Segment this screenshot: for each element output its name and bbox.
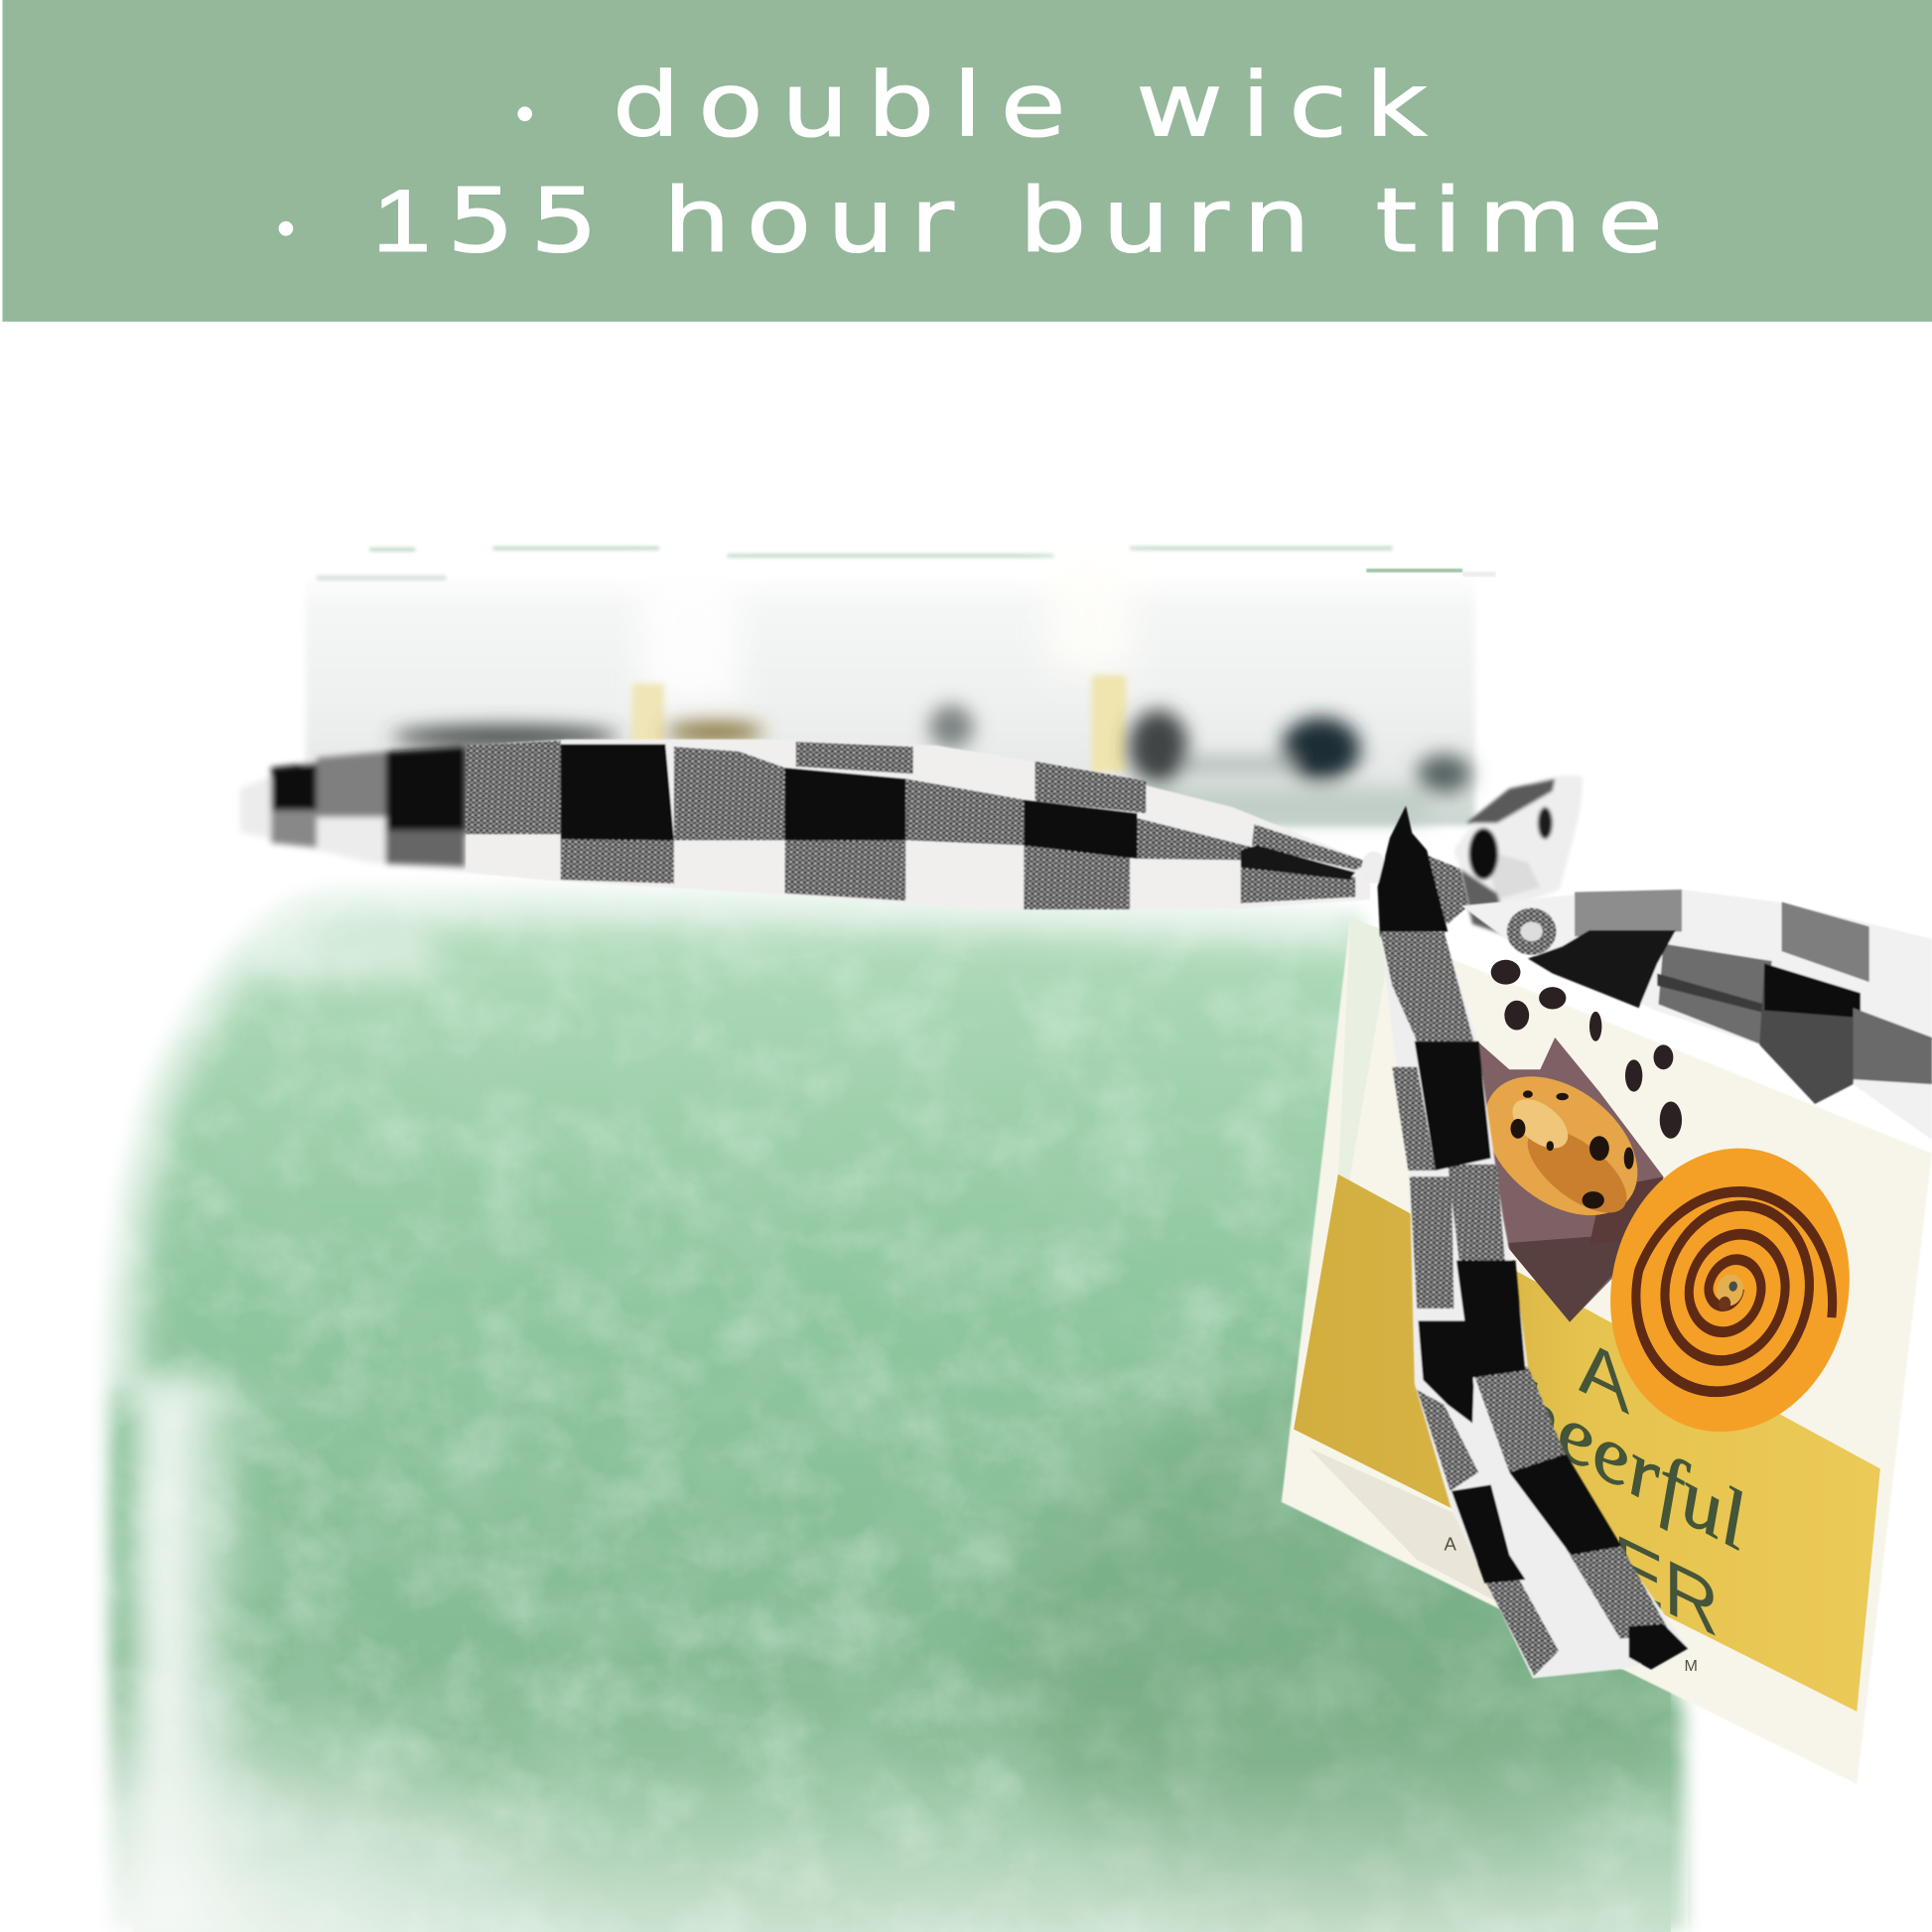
blurred ribbon reflection (392, 705, 1471, 823)
line: 155 hour burn time: • (277, 201, 295, 256)
top banner (2, 0, 1932, 322)
ribbon knot (1361, 806, 1468, 936)
tag lettering: heerful (1518, 1357, 1743, 1573)
glass jar neck (306, 548, 1496, 826)
tag lettering: A (1579, 1321, 1630, 1432)
jar and wax photograph background (50, 548, 1774, 1932)
wicks and flame glow (632, 554, 1134, 771)
hanging ribbon strip (1380, 931, 1688, 1678)
hang tag (1282, 918, 1932, 1784)
blurred left ribbon end (240, 745, 492, 873)
tag lettering (1445, 1321, 1743, 1675)
cinnamon roll illustration (1585, 1126, 1875, 1454)
line: 155 hour burn time: 155 hour burn time (372, 170, 1663, 273)
yellow label band (1294, 1174, 1880, 1712)
tag lettering: M (1685, 1657, 1698, 1675)
line: double wick: • (516, 86, 533, 142)
right ribbon tail (1461, 890, 1932, 1140)
gingham ribbon around jar neck (240, 740, 1932, 1678)
tag lettering: ER (1613, 1517, 1719, 1654)
muffin illustration (1458, 1037, 1664, 1322)
tag lettering: A (1445, 1533, 1457, 1554)
sharp ribbon section (466, 740, 1370, 909)
bow loop (1453, 775, 1583, 936)
green wax body (50, 863, 1774, 1932)
chocolate chips (1491, 960, 1682, 1139)
line: double wick: double wick (613, 54, 1427, 157)
